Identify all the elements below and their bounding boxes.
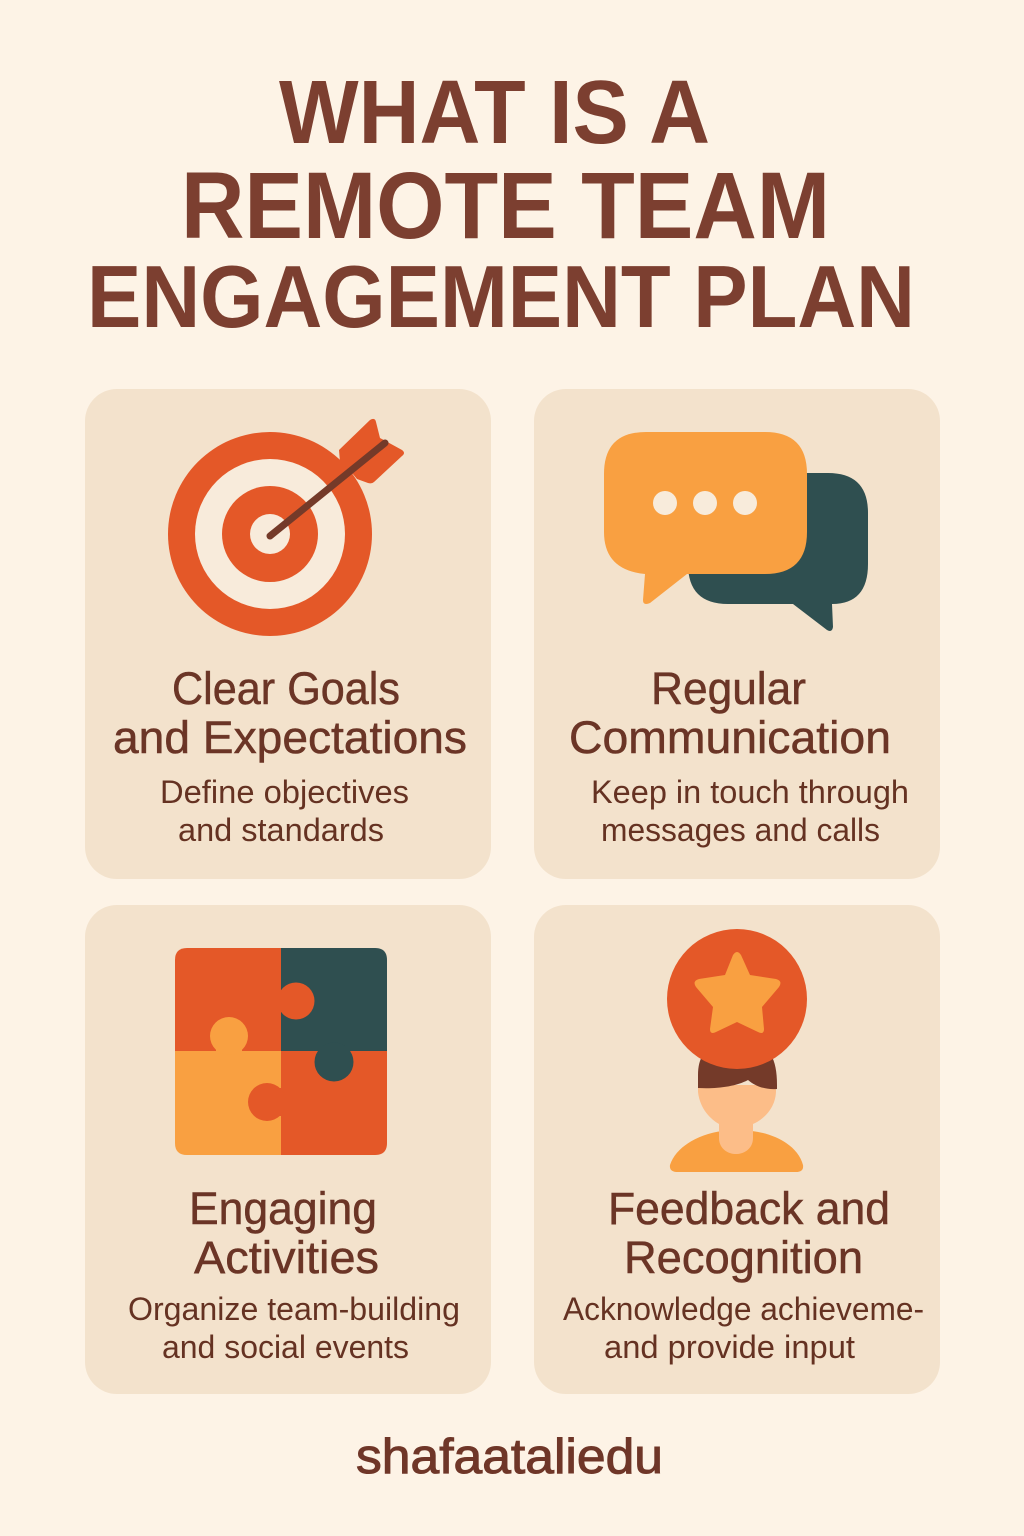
panel: regular communication: [534, 389, 940, 879]
text: clear goals description: and standards: [178, 812, 384, 848]
text: feedback and recognition description: and provide input: [604, 1329, 855, 1365]
icon: target with arrow: [168, 419, 404, 636]
text: clear goals description: Define objectives: [160, 774, 409, 810]
title: ENGAGEMENT PLAN: [87, 247, 915, 346]
text: engaging activities description: [128, 1291, 460, 1365]
heading: engaging activities: Engaging: [189, 1183, 377, 1234]
icon: person with star: [667, 929, 807, 1172]
title: [87, 63, 915, 346]
text: regular communication description: Keep in touch through: [591, 774, 909, 810]
text: regular communication description: messages and calls: [601, 812, 880, 848]
heading: feedback and recognition: [608, 1183, 890, 1283]
heading: feedback and recognition: Recognition: [624, 1232, 863, 1283]
panel: clear goals: [85, 389, 491, 879]
heading: clear goals: Clear Goals: [172, 663, 400, 714]
title: WHAT IS A: [279, 63, 710, 163]
title: REMOTE TEAM: [181, 153, 830, 259]
panel: engaging activities: [85, 905, 491, 1394]
text: regular communication description: [591, 774, 909, 848]
heading: clear goals: [113, 663, 467, 763]
text: clear goals description: [160, 774, 409, 848]
text: feedback and recognition description: [563, 1291, 924, 1365]
text: feedback and recognition description: Acknowledge achieveme-: [563, 1291, 924, 1327]
footer: brand name: shafaataliedu: [356, 1430, 663, 1484]
heading: regular communication: [569, 663, 891, 763]
heading: clear goals: and Expectations: [113, 712, 467, 763]
icon: puzzle: [175, 948, 387, 1155]
heading: regular communication: Regular: [651, 663, 806, 714]
panel: feedback and recognition: [534, 905, 940, 1394]
heading: engaging activities: [189, 1183, 379, 1283]
heading: engaging activities: Activities: [194, 1232, 379, 1283]
text: engaging activities description: Organize team-building: [128, 1291, 460, 1327]
heading: feedback and recognition: Feedback and: [608, 1183, 890, 1234]
icon: speech bubbles: [604, 432, 868, 631]
heading: regular communication: Communication: [569, 712, 891, 763]
text: engaging activities description: and social events: [162, 1329, 409, 1365]
